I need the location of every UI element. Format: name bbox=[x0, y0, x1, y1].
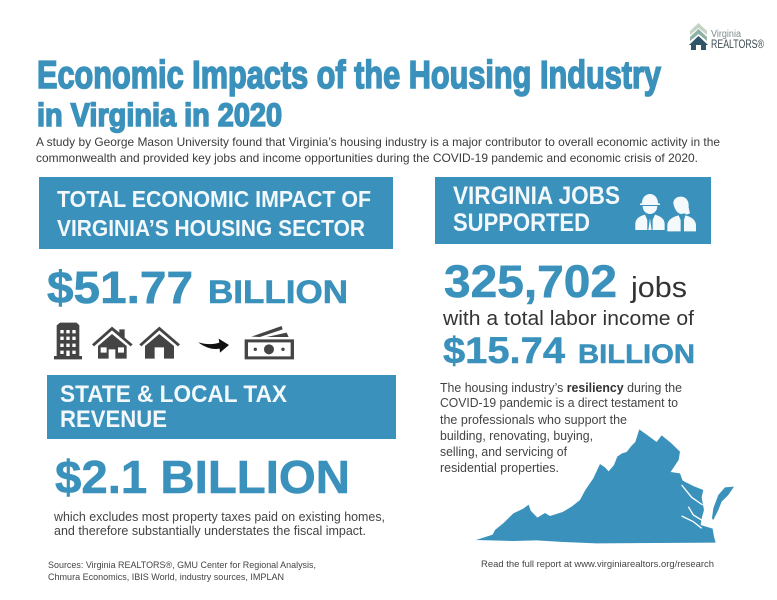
figure: $15.74 billion: $15.74 bbox=[443, 330, 565, 371]
panel: Virginia jobs supported heading: VIRGINIA JOBS bbox=[453, 182, 620, 210]
resiliency text: selling, and servicing of bbox=[440, 445, 568, 459]
icons: buildings to money bbox=[54, 323, 294, 359]
icon: house with windows bbox=[92, 327, 133, 359]
panel: Virginia jobs supported heading bbox=[435, 177, 711, 244]
tax note: and therefore substantially understates the fiscal impact. bbox=[54, 523, 366, 538]
tax note bbox=[53, 509, 385, 538]
figure: $15.74 billion: BILLION bbox=[578, 339, 695, 369]
panel: Virginia jobs supported heading: SUPPORTED bbox=[453, 209, 590, 237]
title: in Virginia in 2020 bbox=[37, 97, 282, 133]
resiliency text: building, renovating, buying, bbox=[440, 429, 593, 443]
icon: apartment building bbox=[54, 323, 82, 359]
logo: Virginia Realtors bbox=[689, 23, 764, 51]
map: Virginia bbox=[476, 429, 734, 543]
figure: $51.77 billion: $51.77 bbox=[47, 262, 193, 313]
arrow bbox=[198, 339, 229, 353]
panel: state and local tax revenue heading: REVENUE bbox=[60, 406, 167, 433]
panel: total economic impact heading: TOTAL ECONOMIC IMPACT OF bbox=[57, 186, 371, 212]
labor income line: with a total labor income of bbox=[442, 308, 694, 330]
sources bbox=[48, 560, 316, 583]
resiliency text: The housing industry’s resiliency during the bbox=[440, 381, 682, 395]
resiliency text: residential properties. bbox=[440, 461, 559, 475]
panel: total economic impact heading bbox=[39, 177, 393, 249]
icon: workers bbox=[635, 194, 696, 231]
icon: house bbox=[139, 327, 180, 359]
logo: Virginia Realtors: Virginia bbox=[711, 28, 741, 40]
panel: state and local tax revenue heading: STATE & LOCAL TAX bbox=[60, 381, 287, 408]
figure: $2.1 billion: $2.1 BILLION bbox=[55, 451, 350, 503]
title bbox=[37, 54, 661, 133]
resiliency text: the professionals who support the bbox=[440, 413, 627, 427]
icon: money stack bbox=[245, 326, 294, 359]
tax note: which excludes most property taxes paid on existing homes, bbox=[53, 509, 385, 524]
intro text: A study by George Mason University found that Virginia’s housing industry is a major contributor to overall economic activity in the bbox=[36, 135, 720, 149]
figure: 325,702 jobs: jobs bbox=[630, 272, 687, 304]
sources: Chmura Economics, IBIS World, industry sources, IMPLAN bbox=[48, 572, 284, 583]
intro text bbox=[36, 135, 720, 165]
panel: total economic impact heading: VIRGINIA’S HOUSING SECTOR bbox=[57, 215, 365, 241]
panel: state and local tax revenue heading bbox=[47, 375, 396, 439]
sources: Sources: Virginia REALTORS®, GMU Center for Regional Analysis, bbox=[48, 560, 316, 571]
resiliency text: COVID-19 pandemic is a direct testament to bbox=[440, 396, 678, 410]
intro text: commonwealth and provided key jobs and income opportunities during the COVID-19 pandemic and economic crisis of 2020. bbox=[36, 151, 698, 165]
figure: $15.74 billion bbox=[443, 330, 695, 371]
figure: $51.77 billion bbox=[47, 262, 348, 313]
figure: 325,702 jobs bbox=[444, 256, 687, 307]
resiliency text bbox=[440, 381, 682, 475]
figure: $51.77 billion: BILLION bbox=[208, 274, 348, 310]
figure: 325,702 jobs: 325,702 bbox=[444, 256, 617, 307]
report link: Read the full report at www.virginiarealtors.org/research bbox=[481, 559, 714, 570]
